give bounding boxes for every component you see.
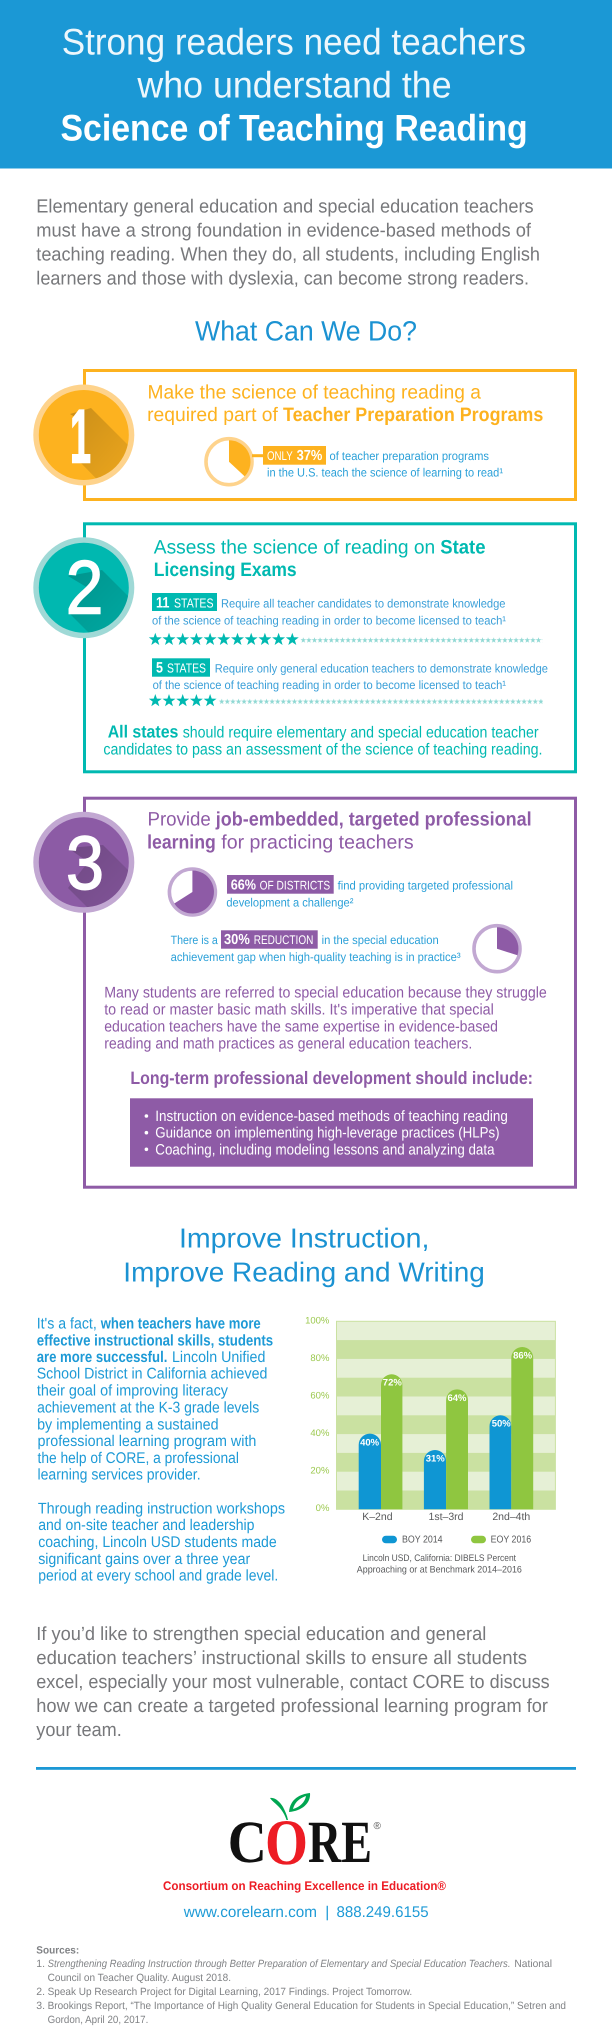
icon: number 1 badge: 1 (70, 394, 91, 479)
callout: 66% of districts: development a challenge² (226, 896, 353, 910)
y axis labels: 80% (310, 1353, 330, 1364)
heading: panel 2: Licensing Exams (154, 559, 297, 581)
panel 1: teacher preparation programs (33, 370, 576, 503)
sources: 3. (36, 2000, 45, 2012)
bar value labels: 40% (360, 1438, 380, 1449)
logo wordmark: ® (374, 1821, 382, 1832)
text: special education paragraph: Many students are referred to special education because they struggle (104, 985, 547, 1002)
logo wordmark: O (265, 1807, 308, 1879)
text: special education paragraph (104, 985, 547, 1052)
y axis labels: 100% (305, 1315, 330, 1326)
logo wordmark: C (228, 1809, 267, 1875)
icon: number 2 badge: 2 (66, 546, 103, 630)
bar value labels: 50% (492, 1418, 511, 1429)
bar value labels: 31% (426, 1454, 445, 1465)
icon: number 2 badge (33, 537, 134, 638)
sources: Council on Teacher Quality. August 2018. (48, 1972, 231, 1984)
heading: panel 3: learning (147, 831, 216, 853)
closing call to action paragraph (36, 1624, 550, 1741)
contact line: | (325, 1904, 329, 1921)
callout: 66% of districts: 66% (231, 877, 256, 893)
sources: Brookings Report, “The Importance of High Quality General Education for Students in Special Education,” Setren and (48, 2000, 566, 2012)
heading: Improve Instruction, Improve Reading and Writing: Improve Reading and Writing (123, 1257, 485, 1288)
text: Lincoln Unified case study: and on-site teacher and leadership (38, 1517, 255, 1534)
subheading: long-term professional development: Long-term professional development should include: (130, 1068, 533, 1088)
y axis labels (305, 1315, 330, 1514)
y axis labels: 60% (310, 1390, 330, 1401)
text: Lincoln Unified case study: learning services provider. (38, 1467, 201, 1484)
contact line: www.corelearn.com (183, 1904, 317, 1921)
text: Lincoln Unified case study: coaching, Lincoln USD students made (38, 1534, 277, 1551)
text: all states should require: candidates to pass an assessment of the science of teaching reading. (103, 741, 543, 758)
header banner: Strong readers need teachers (62, 21, 526, 62)
heading: panel 3: for practicing teachers (221, 831, 414, 853)
callout: 30% reduction: 30% (224, 932, 250, 948)
text: special education paragraph: reading and math practices as general education teachers. (104, 1035, 472, 1052)
closing call to action paragraph: If you’d like to strengthen special education and general (36, 1624, 486, 1645)
y axis labels: 20% (310, 1465, 330, 1476)
x axis labels: K–2nd (362, 1511, 393, 1523)
icon: number 3 badge: 3 (66, 821, 104, 906)
text: Lincoln Unified case study: Lincoln Unified (172, 1349, 265, 1366)
callout: only 37%: ONLY (267, 449, 293, 463)
legend: EOY 2016 (491, 1534, 532, 1545)
header banner (0, 0, 612, 168)
icon: apple leaves (270, 1793, 310, 1820)
chart caption (357, 1553, 522, 1576)
heading: panel 3: job-embedded, targeted professional (215, 809, 532, 831)
closing call to action paragraph: excel, especially your most vulnerable, contact CORE to discuss (36, 1672, 550, 1693)
x axis labels (362, 1511, 530, 1523)
chart plot bands (336, 1321, 555, 1509)
callout: 30% reduction: There is a (171, 933, 218, 947)
text: Lincoln Unified case study: significant gains over a three year (38, 1551, 250, 1568)
list box: professional development items: Instruction on evidence-based methods of teaching reading (155, 1108, 508, 1125)
callout: only 37%: 37% (297, 448, 322, 464)
text: all states should require (103, 721, 543, 758)
heading: Improve Instruction, Improve Reading and Writing: Improve Instruction, (179, 1223, 429, 1254)
heading: Improve Instruction, Improve Reading and Writing (123, 1223, 485, 1288)
sources: Strengthening Reading Instruction through Better Preparation of Elementary and Special Education Teachers. (48, 1958, 510, 1970)
panel 3: professional learning (33, 798, 576, 1187)
logo wordmark (228, 1807, 382, 1879)
sources: Sources: (36, 1944, 79, 1956)
intro paragraph: teaching reading. When they do, all students, including English (36, 245, 540, 266)
sources: 1. (36, 1958, 45, 1970)
text: Lincoln Unified case study: effective instructional skills, students (37, 1332, 273, 1349)
sources: Gordon, April 20, 2017. (48, 2014, 148, 2026)
heading: panel 1: Make the science of teaching reading a (148, 381, 481, 403)
heading: panel 3: Provide (148, 809, 211, 831)
bar value labels: 64% (447, 1393, 467, 1404)
header banner: who understand the (136, 65, 452, 106)
panel 2: state licensing exams (33, 524, 576, 772)
callout: 5 states: Require only general education teachers to demonstrate knowledge (215, 661, 548, 675)
bar value labels: 72% (383, 1378, 402, 1389)
text: Lincoln Unified case study: It's a fact, (37, 1315, 97, 1332)
chart caption: Lincoln USD, California: DIBELS Percent (363, 1553, 516, 1564)
bars: EOY 2016 (381, 1347, 533, 1509)
CORE logo (163, 1793, 447, 1893)
icon row: 5 of 50 stars (149, 694, 543, 706)
callout: 66% of districts: find providing targeted professional (338, 878, 513, 892)
closing call to action paragraph: education teachers’ instructional skills to ensure all students (36, 1648, 527, 1669)
header banner: Science of Teaching Reading (60, 108, 528, 149)
text: Lincoln Unified case study (37, 1315, 285, 1585)
callout: 30% reduction (171, 930, 461, 964)
text: special education paragraph: to read or master basic math skills. It's imperative that special (104, 1002, 494, 1019)
icon: number 3 badge (33, 812, 134, 913)
callout: only 37%: of teacher preparation programs (330, 449, 489, 463)
bar value labels (360, 1351, 533, 1465)
text: all states should require: should require elementary and special education teacher (183, 724, 539, 741)
heading: panel 1 (147, 381, 543, 426)
divider rule (36, 1767, 576, 1770)
logo wordmark: RE (308, 1809, 372, 1875)
callout: 66% of districts: OF DISTRICTS (260, 878, 330, 892)
closing call to action paragraph: how we can create a targeted professional learning program for (36, 1696, 549, 1717)
callout: 11 states: Require all teacher candidates to demonstrate knowledge (221, 596, 506, 610)
pie chart: 37% (206, 439, 264, 485)
contact line: 888.249.6155 (336, 1904, 429, 1921)
heading: panel 1: Teacher Preparation Programs (283, 404, 543, 426)
text: Lincoln Unified case study: professional learning program with (38, 1433, 256, 1450)
text: Lincoln Unified case study: by implementing a sustained (37, 1416, 219, 1433)
pie chart: 30% (474, 926, 520, 972)
sources: Speak Up Research Project for Digital Learning, 2017 Findings. Project Tomorrow. (48, 1986, 412, 1998)
callout: 66% of districts (226, 875, 513, 910)
intro paragraph: learners and those with dyslexia, can become strong readers. (36, 269, 529, 290)
bar value labels: 86% (513, 1351, 533, 1362)
pie chart: 66% (169, 869, 215, 915)
callout: 30% reduction: in the special education (322, 933, 439, 947)
text: Lincoln Unified case study: are more successful. (37, 1349, 167, 1366)
intro paragraph: Elementary general education and special education teachers (36, 197, 534, 218)
legend: BOY 2014 (402, 1534, 443, 1545)
callout: 30% reduction: REDUCTION (254, 933, 313, 947)
intro paragraph (36, 197, 540, 290)
y axis labels: 40% (310, 1428, 330, 1439)
icon: number 1 badge (33, 384, 134, 486)
closing call to action paragraph: your team. (36, 1720, 122, 1741)
x axis labels: 2nd–4th (492, 1511, 530, 1523)
callout: 5 states: of the science of teaching reading in order to become licensed to teach¹ (153, 678, 506, 692)
heading: panel 2: State (440, 536, 486, 558)
text: Lincoln Unified case study: Through reading instruction workshops (38, 1500, 285, 1517)
heading: panel 2: Assess the science of reading on (154, 536, 435, 558)
bars: BOY 2014 (359, 1415, 511, 1509)
y axis labels: 0% (316, 1503, 330, 1514)
intro paragraph: must have a strong foundation in evidence-based methods of (36, 221, 532, 242)
callout: only 37%: in the U.S. teach the science of learning to read¹ (267, 466, 503, 480)
sources (36, 1944, 566, 2026)
text: Lincoln Unified case study: achievement at the K-3 grade levels (37, 1399, 259, 1416)
callout: 11 states (152, 593, 506, 627)
logo tagline: Consortium on Reaching Excellence in Education® (163, 1879, 447, 1893)
callout: 11 states: STATES (174, 595, 214, 610)
x axis labels: 1st–3rd (428, 1511, 464, 1523)
heading: panel 3 (147, 809, 532, 853)
callout: 5 states: 5 (156, 659, 163, 676)
text: Lincoln Unified case study: when teachers have more (100, 1315, 261, 1332)
heading: What Can We Do?: What Can We Do? (195, 316, 417, 347)
callout: 11 states: 11 (156, 594, 169, 611)
callout: 5 states: STATES (167, 660, 206, 675)
text: Lincoln Unified case study: School District in California achieved (37, 1366, 267, 1383)
heading: panel 1: required part of (147, 404, 278, 426)
list box: professional development items (130, 1098, 533, 1167)
heading: panel 2 (154, 536, 486, 581)
text: Lincoln Unified case study: the help of CORE, a professional (38, 1450, 239, 1467)
legend (382, 1534, 532, 1545)
callout: 11 states: of the science of teaching reading in order to become licensed to teach¹ (152, 613, 506, 627)
contact line (183, 1904, 429, 1921)
sources: 2. (36, 1986, 45, 1998)
icon row: 11 of 50 stars (149, 633, 542, 645)
chart caption: Approaching or at Benchmark 2014–2016 (357, 1565, 522, 1576)
text: special education paragraph: education teachers have the same expertise in evidence-based (104, 1018, 498, 1035)
callout: 30% reduction: achievement gap when high-quality teaching is in practice³ (171, 950, 461, 964)
list box: professional development items: Guidance on implementing high-leverage practices (HLPs) (155, 1125, 500, 1142)
bar chart: DIBELS percent at benchmark (305, 1315, 555, 1576)
text: all states should require: All states (108, 721, 179, 741)
sources: National (514, 1958, 552, 1970)
text: Lincoln Unified case study: their goal of improving literacy (37, 1383, 228, 1400)
text: Lincoln Unified case study: period at every school and grade level. (38, 1568, 278, 1585)
callout: only 37% (263, 446, 503, 480)
list box: professional development items: Coaching, including modeling lessons and analyzing data (155, 1141, 495, 1158)
callout: 5 states (152, 658, 548, 692)
